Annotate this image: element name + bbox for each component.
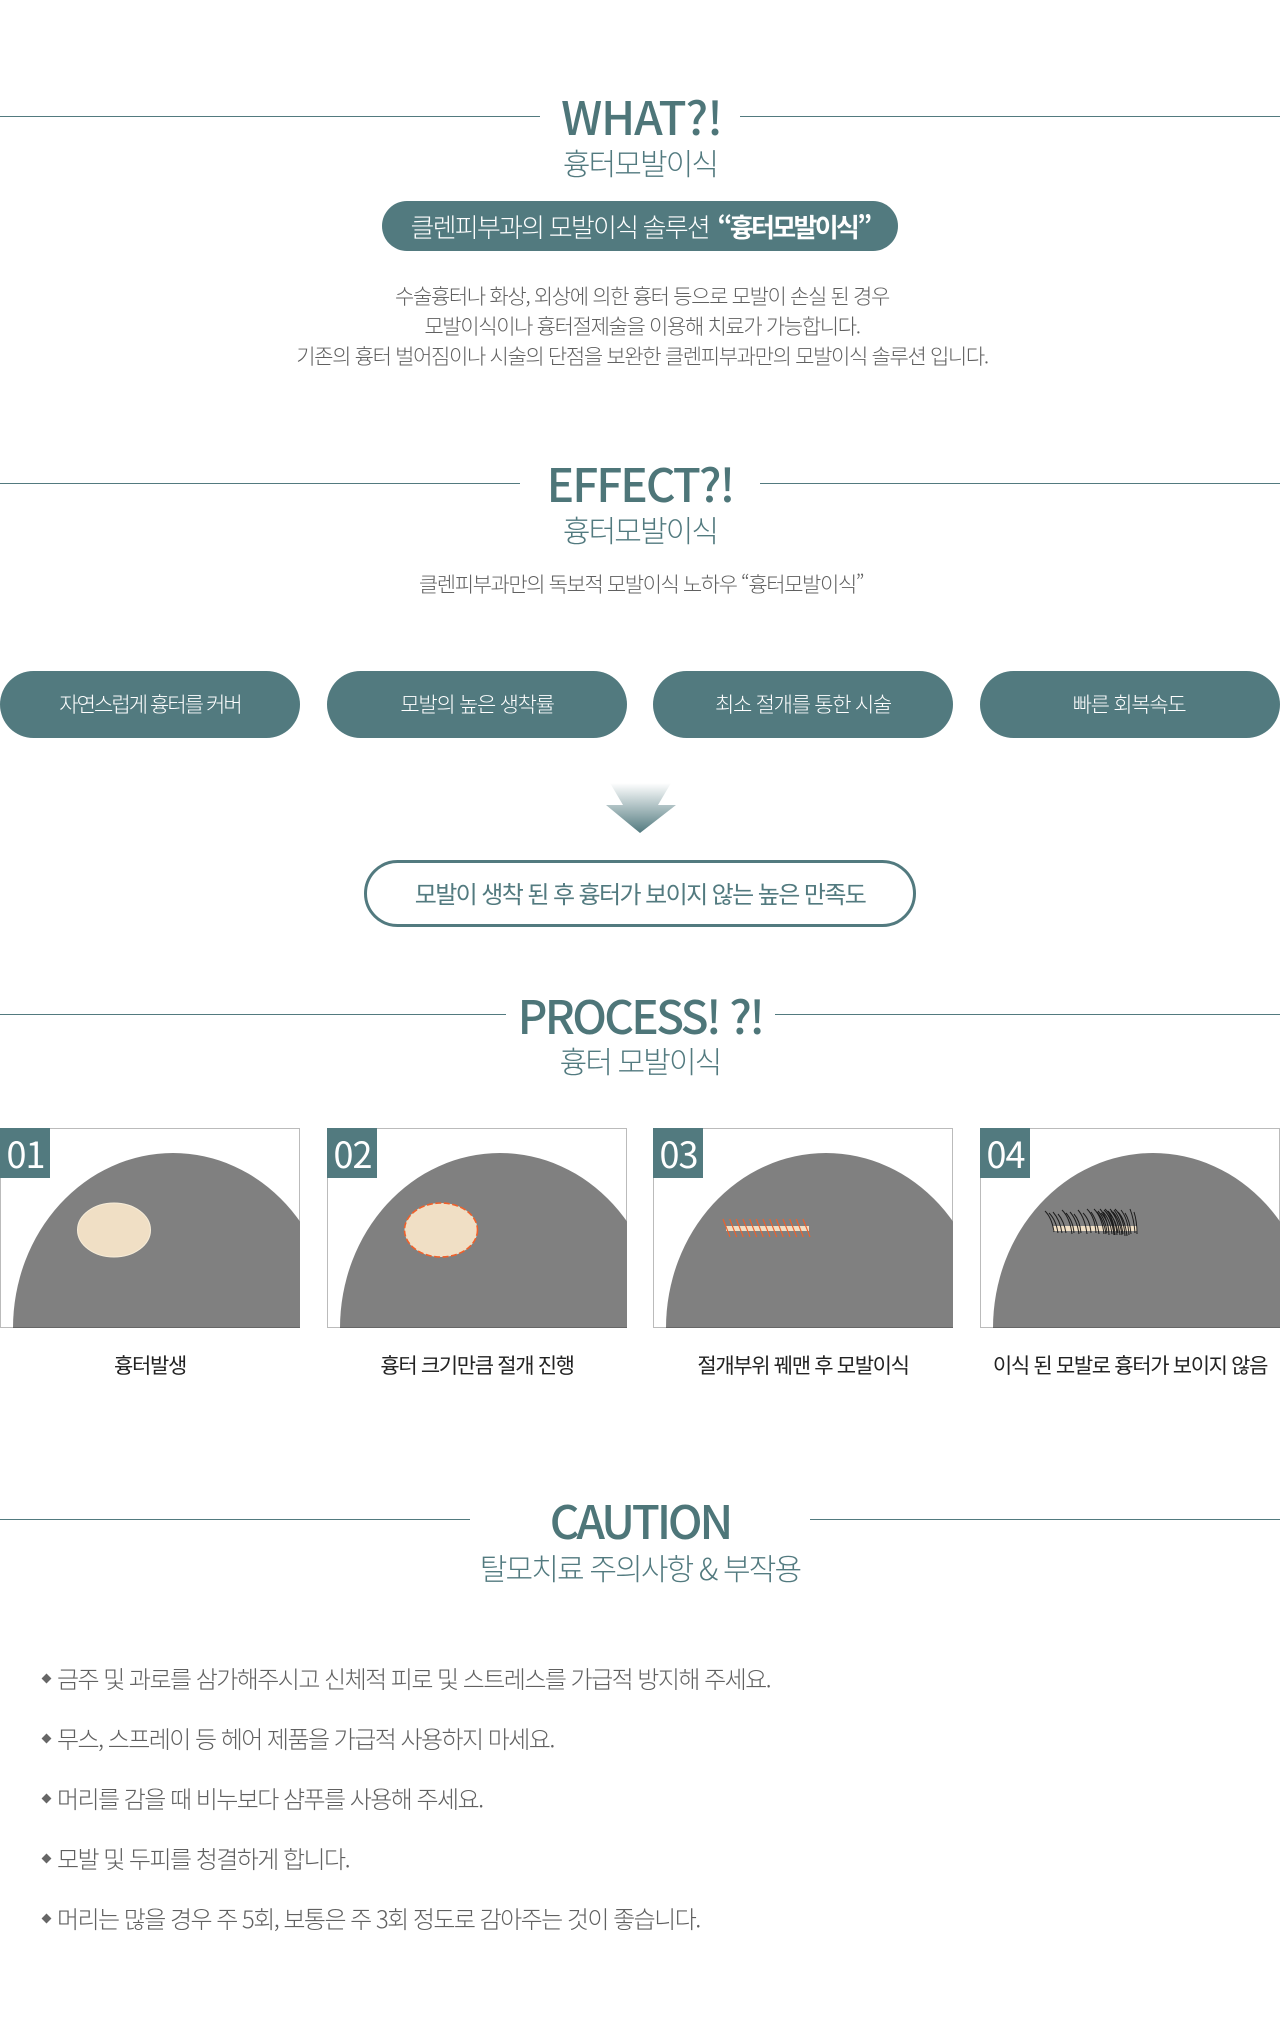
list: caution items [42,1660,770,1935]
badge: 04: 04 [987,1127,1024,1179]
list item 2: 무스, 스프레이 등 헤어 제품을 가급적 사용하지 마세요. [57,1720,554,1755]
section heading: PROCESS [0,982,1280,1082]
list item 1: 금주 및 과로를 삼가해주시고 신체적 피로 및 스트레스를 가급적 방지해 주세요. [57,1660,770,1695]
pill: solution banner: 클렌피부과의 모발이식 솔루션 “흉터모발이식” [411,208,869,245]
badge: 03: 03 [660,1127,697,1179]
panel: step 01 [0,1127,300,1328]
badge: 01: 01 [7,1127,44,1179]
caption: step 03: 절개부위 꿰맨 후 모발이식 [697,1350,909,1380]
badge: 02: 02 [334,1127,371,1179]
section heading: EFFECT: 흉터모발이식 [563,507,717,551]
section heading: EFFECT [0,450,1280,551]
section heading: WHAT: WHAT?! [561,83,722,149]
section heading: PROCESS: 흉터 모발이식 [560,1038,720,1082]
icon: gradient down arrow [606,786,676,833]
list item 4: 모발 및 두피를 청결하게 합니다. [57,1840,349,1875]
pill: effect 2 [327,671,627,738]
pill: effect 4 [980,671,1280,738]
list item 3: 머리를 감을 때 비누보다 샴푸를 사용해 주세요. [57,1780,483,1815]
list item 5: 머리는 많을 경우 주 5회, 보통은 주 3회 정도로 감아주는 것이 좋습니다. [57,1900,700,1935]
text block: effect intro: 클렌피부과만의 독보적 모발이식 노하우 “흉터모발이식” [419,569,863,599]
section heading: CAUTION [0,1487,1280,1589]
section heading: PROCESS: PROCESS! ?! [518,982,762,1048]
pill: effect 4: 빠른 회복속도 [1073,689,1185,719]
callout: result outlined pill [364,860,916,927]
pill: effect 3 [653,671,953,738]
section heading: WHAT [0,83,1280,184]
panel: step 03 [653,1127,953,1328]
callout: result outlined pill: 모발이 생착 된 후 흉터가 보이지 않는 높은 만족도 [415,875,865,910]
section heading: CAUTION: 탈모치료 주의사항 & 부작용 [480,1545,800,1589]
section heading: CAUTION: CAUTION [550,1487,730,1553]
pill: effect 1 [0,671,300,738]
section heading: WHAT: 흉터모발이식 [563,140,717,184]
panel: step 04 [980,1127,1280,1328]
pill: effect 1: 자연스럽게 흉터를 커버 [59,689,241,719]
pill: effect 2: 모발의 높은 생착률 [400,689,554,719]
text block: what description: 모발이식이나 흉터절제술을 이용해 치료가 가능합니다. [424,311,860,341]
text block: what description [296,281,988,371]
text block: what description: 수술흉터나 화상, 외상에 의한 흉터 등으로 모발이 손실 된 경우 [395,281,889,311]
caption: step 02: 흉터 크기만큼 절개 진행 [380,1350,574,1380]
pill: effect 3: 최소 절개를 통한 시술 [715,689,891,719]
caption: step 04: 이식 된 모발로 흉터가 보이지 않음 [993,1350,1267,1380]
caption: step 01: 흉터발생 [114,1350,186,1380]
section heading: EFFECT: EFFECT?! [547,450,733,516]
text block: what description: 기존의 흉터 벌어짐이나 시술의 단점을 보완한 클렌피부과만의 모발이식 솔루션 입니다. [296,341,988,371]
pill: solution banner [382,201,898,251]
panel: step 02 [327,1127,627,1328]
